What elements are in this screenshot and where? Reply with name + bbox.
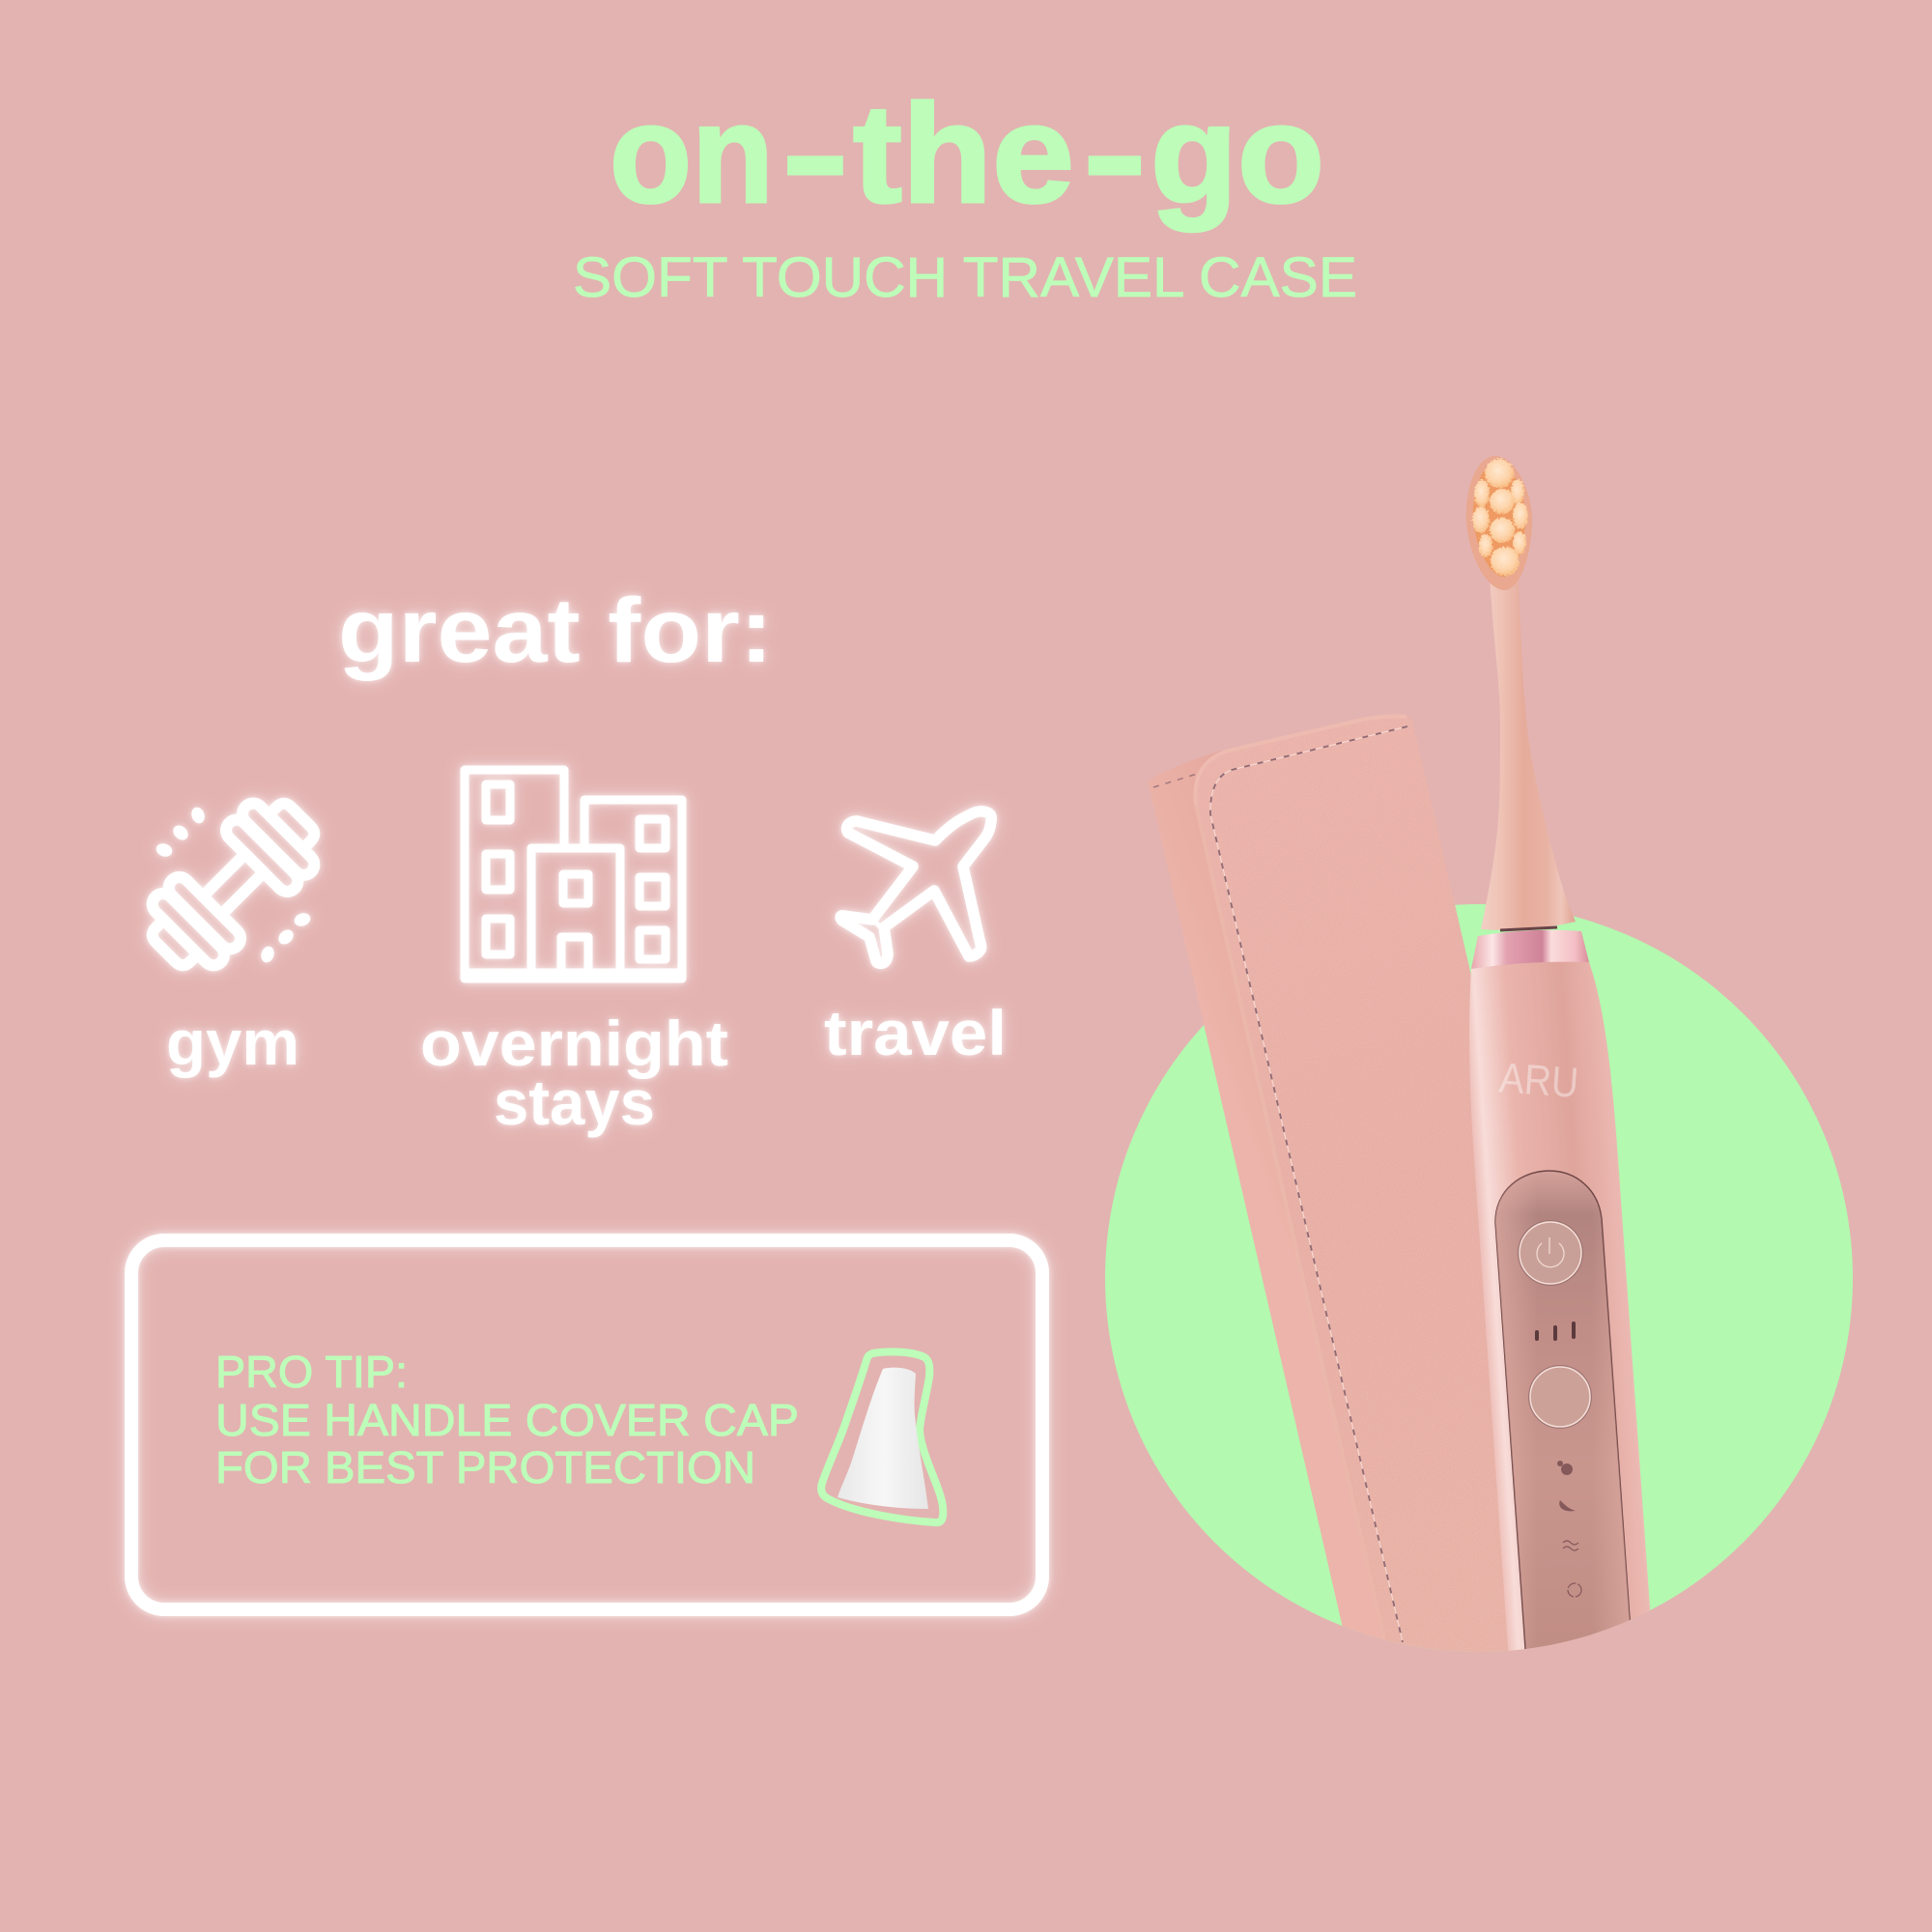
- panel: pro tip box: [131, 1240, 1042, 1609]
- green circle: [1105, 904, 1853, 1652]
- mode button: [1528, 1365, 1592, 1429]
- title: go: [1151, 75, 1324, 232]
- pro tip text: [215, 1347, 799, 1492]
- title: -: [781, 75, 849, 232]
- pro tip text: PRO TIP:: [215, 1347, 408, 1397]
- title: -: [1083, 75, 1147, 232]
- travel case: [1148, 716, 1662, 1662]
- brush neck: [1481, 580, 1576, 930]
- brush head: [1466, 456, 1532, 590]
- label: travel: travel: [824, 997, 1007, 1068]
- heading: great for: great for:: [338, 580, 773, 682]
- power button: [1518, 1220, 1583, 1286]
- label: overnight stays: overnight: [420, 1008, 728, 1079]
- label: gym: gym: [166, 1007, 299, 1078]
- pro tip text: USE HANDLE COVER CAP: [215, 1395, 799, 1445]
- title: [610, 75, 1324, 232]
- metal collar: [1471, 930, 1589, 969]
- icon: plane: [840, 811, 991, 963]
- pro tip text: FOR BEST PROTECTION: [215, 1442, 755, 1492]
- icon: buildings: [465, 770, 682, 979]
- mode icons: [1557, 1461, 1581, 1597]
- handle body: [1469, 962, 1658, 1662]
- title: on: [610, 75, 774, 232]
- LED indicators: [1535, 1321, 1576, 1341]
- brand mark: ARU: [1497, 1054, 1580, 1107]
- control panel: [1495, 1171, 1633, 1662]
- product photo: [1148, 456, 1662, 1662]
- toothbrush: [1466, 456, 1658, 1662]
- subtitle: SOFT TOUCH TRAVEL CASE: [573, 246, 1357, 309]
- icon: handle cover cap: [821, 1351, 943, 1522]
- icon: dumbbell: [133, 784, 333, 984]
- label: overnight stays: stays: [494, 1066, 655, 1138]
- neck base gap: [1500, 927, 1557, 930]
- label: overnight stays: [420, 1008, 728, 1138]
- title: the: [853, 75, 1074, 232]
